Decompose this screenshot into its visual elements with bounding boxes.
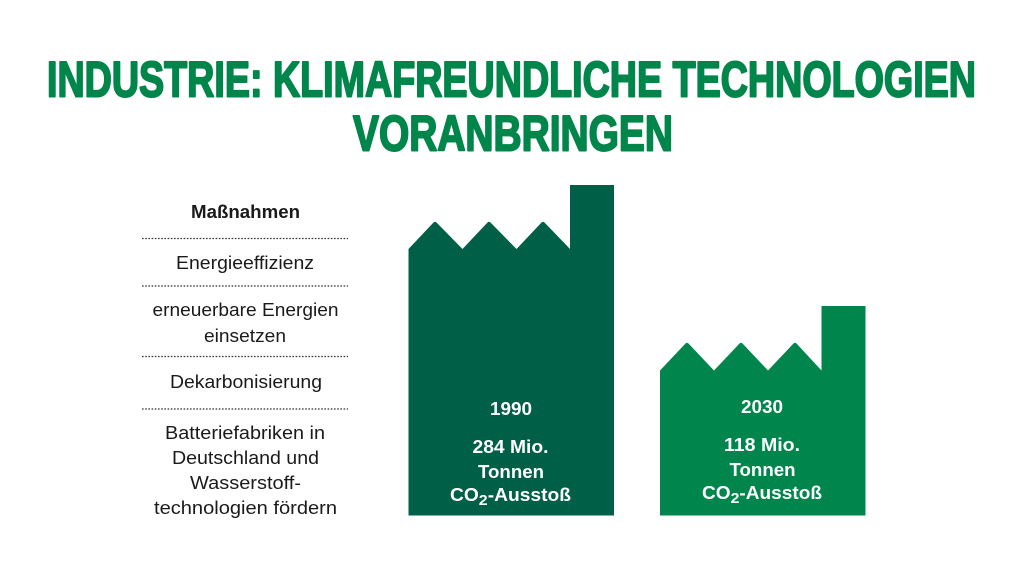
heading: Maßnahmen: Maßnahmen [191, 202, 300, 222]
measure: Energieeffizienz: Energieeffizienz [176, 253, 314, 273]
icon: green factory [660, 306, 866, 516]
label: 284 Mio. Tonnen CO2-Ausstoß: -Ausstoß [488, 485, 571, 505]
title [47, 52, 976, 162]
label: 118 Mio. Tonnen CO2-Ausstoß: 2 [731, 490, 739, 507]
label: 118 Mio. Tonnen CO2-Ausstoß: CO [702, 483, 729, 503]
measure: erneuerbare Energien einsetzen: erneuerbare Energien [152, 300, 338, 320]
icon: dark green factory [408, 185, 614, 516]
measure: erneuerbare Energien einsetzen [152, 300, 338, 346]
panel: measures list [142, 202, 348, 518]
label: 118 Mio. Tonnen CO2-Ausstoß: Tonnen [730, 460, 796, 480]
measure: Batteriefabriken und Wasserstofftechnologien: Deutschland und [172, 448, 319, 468]
label: 284 Mio. Tonnen CO2-Ausstoß [450, 437, 571, 509]
measure: Batteriefabriken und Wasserstofftechnologien: Wasserstoff- [190, 473, 301, 493]
label: 284 Mio. Tonnen CO2-Ausstoß: CO [450, 485, 477, 505]
label: 118 Mio. Tonnen CO2-Ausstoß [702, 435, 822, 507]
label: 284 Mio. Tonnen CO2-Ausstoß: 2 [479, 492, 488, 509]
label: 118 Mio. Tonnen CO2-Ausstoß: 118 Mio. [724, 435, 800, 455]
label: 118 Mio. Tonnen CO2-Ausstoß: -Ausstoß [739, 483, 822, 503]
panel: factory 2030 [660, 306, 866, 516]
measure: erneuerbare Energien einsetzen: einsetzen [204, 326, 286, 346]
measure: Batteriefabriken und Wasserstofftechnologien: technologien fördern [154, 498, 337, 518]
title: VORANBRINGEN [353, 106, 673, 162]
measure: Dekarbonisierung: Dekarbonisierung [170, 372, 322, 392]
label: 284 Mio. Tonnen CO2-Ausstoß: Tonnen [478, 462, 544, 482]
measure: Batteriefabriken und Wasserstofftechnologien: Batteriefabriken in [165, 423, 325, 443]
label: 2030: 2030 [741, 397, 783, 417]
measure: Batteriefabriken und Wasserstofftechnologien [154, 423, 337, 518]
label: 1990: 1990 [490, 399, 532, 419]
label: 284 Mio. Tonnen CO2-Ausstoß: 284 Mio. [472, 437, 548, 457]
panel: factory 1990 [408, 185, 614, 516]
